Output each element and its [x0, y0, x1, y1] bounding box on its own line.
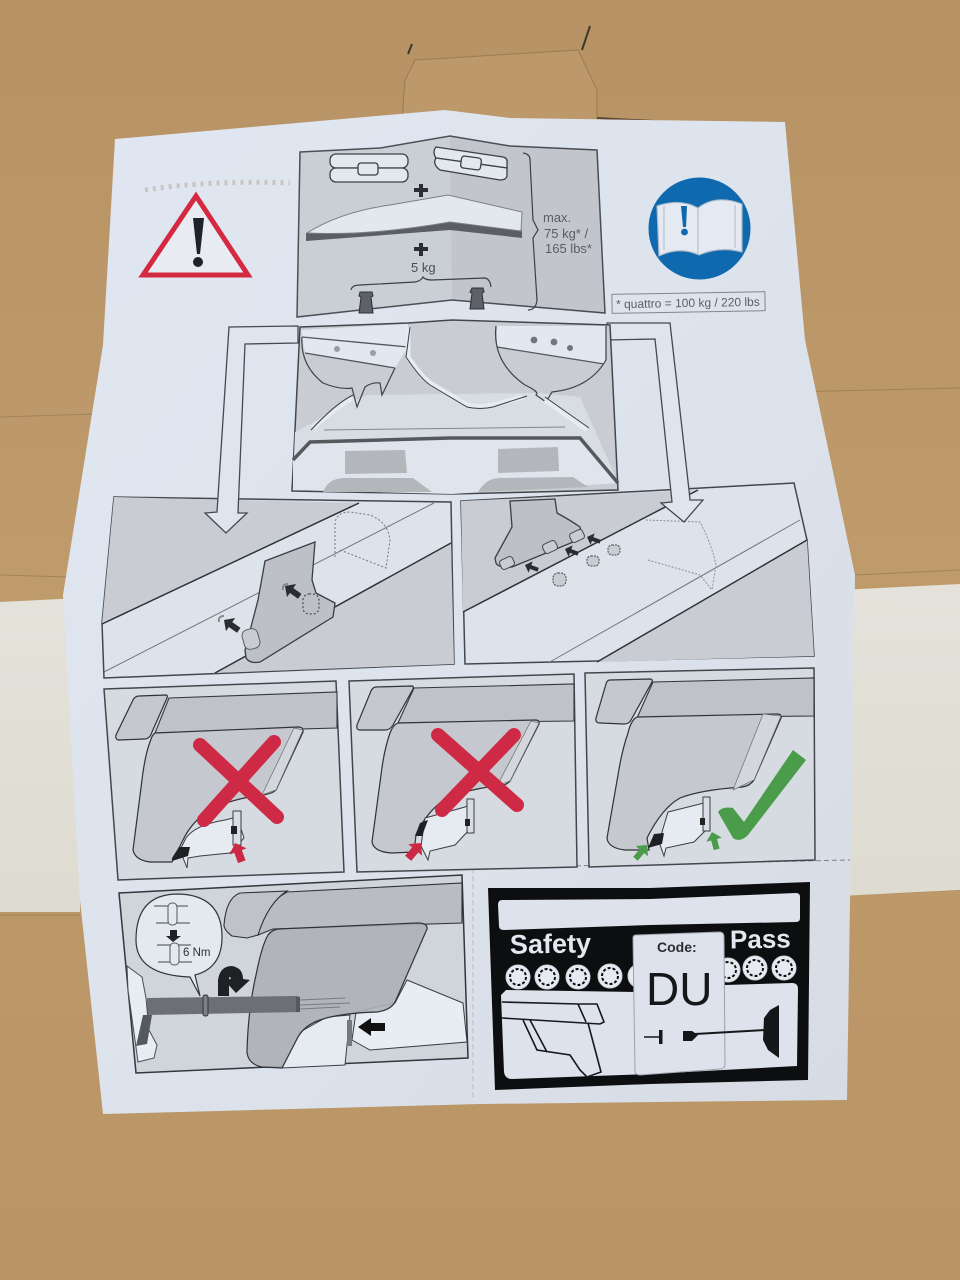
panel: left fixing step — [102, 497, 454, 678]
text: 5 kg: 5 kg — [411, 260, 436, 275]
text: quattro note: * quattro = 100 kg / 220 lbs — [616, 295, 760, 311]
text: Safety: Safety — [510, 928, 591, 960]
panel: correct fitting — [585, 668, 815, 867]
text: max load: 165 lbs* — [545, 241, 592, 256]
icon: read manual — [648, 178, 750, 280]
right roof rail — [497, 326, 606, 365]
roof bars — [330, 147, 507, 182]
icon: red cross — [438, 735, 517, 810]
instruction sheet — [63, 110, 855, 1114]
text: Pass: Pass — [730, 923, 791, 955]
panel: load contents — [297, 136, 605, 317]
panel: car rear with hook straps — [292, 320, 618, 494]
car body — [293, 438, 618, 494]
light roof area — [293, 393, 617, 480]
brackets — [523, 153, 538, 310]
arrows — [523, 531, 602, 575]
icon: red arrow — [227, 840, 250, 865]
safety pass sticker — [488, 882, 810, 1090]
code card — [633, 932, 725, 1075]
arrow: left white arrow — [205, 326, 298, 533]
lower clip — [282, 1015, 350, 1068]
left roof rail — [301, 324, 408, 368]
text: 6 Nm: 6 Nm — [183, 947, 210, 959]
blank name field — [498, 893, 800, 930]
plus signs — [414, 184, 428, 256]
foot bracket — [247, 923, 427, 1068]
black push arrow — [358, 1018, 385, 1036]
hook straps — [313, 327, 587, 430]
curved black arrow — [218, 966, 250, 996]
roof box — [306, 195, 522, 241]
icon: red cross — [200, 742, 277, 820]
screws and arrows — [219, 579, 319, 651]
text: DU: DU — [646, 963, 712, 1015]
security rings — [506, 956, 796, 989]
panel: wrong, loose front hook — [349, 674, 577, 872]
panel: right fixing step — [461, 483, 814, 664]
text: Code: Code: — [657, 939, 697, 955]
roof bar — [258, 883, 462, 935]
icon: warning triangle — [143, 196, 248, 275]
dashed foot outline — [335, 512, 390, 568]
white strap — [0, 584, 960, 912]
foot bracket — [245, 542, 335, 662]
foot bracket — [495, 499, 583, 567]
arrow: right white arrow — [607, 323, 703, 522]
panel: torque tightening — [119, 875, 468, 1073]
magnifier with 6 Nm — [136, 894, 222, 996]
icon: green check — [718, 750, 806, 840]
icon: roof rack foot — [502, 1002, 604, 1077]
lower white area — [501, 983, 798, 1079]
icon: red arrow — [401, 837, 428, 864]
text: max load: 75 kg* / — [544, 226, 588, 241]
hand, left — [127, 966, 157, 1062]
icon: green arrows — [629, 830, 724, 864]
feet weights — [359, 288, 484, 313]
screws — [499, 529, 620, 586]
panel: wrong, loose rear screw — [104, 681, 344, 880]
hand, right — [352, 980, 467, 1050]
icon: suction lifter — [695, 1030, 765, 1034]
torque wrench — [147, 995, 350, 1016]
text: max load: max. — [543, 210, 571, 225]
